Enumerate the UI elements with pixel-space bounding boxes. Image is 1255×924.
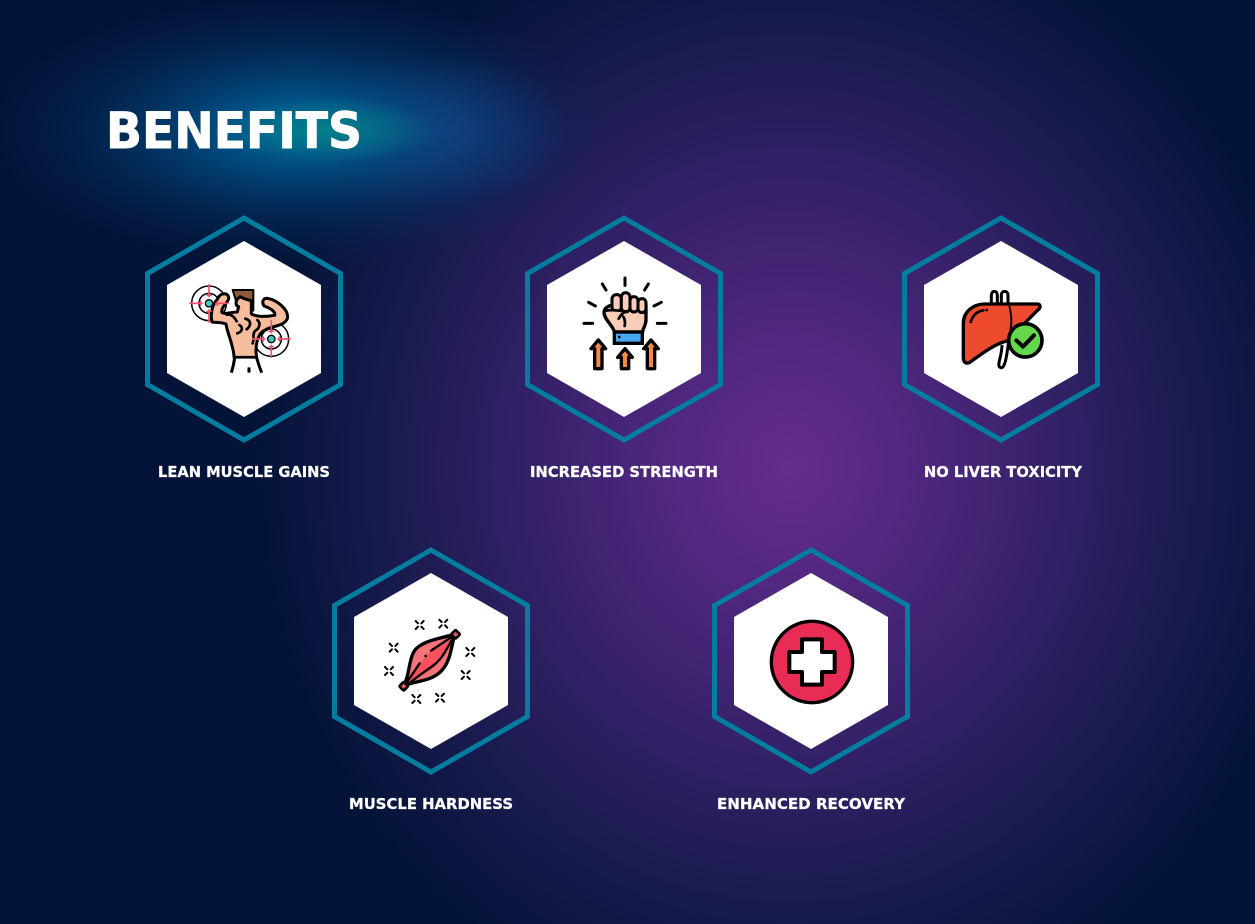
label: MUSCLE HARDNESS: [349, 795, 513, 813]
panel: muscle hardness: [334, 550, 528, 813]
label: LEAN MUSCLE GAINS: [158, 463, 330, 481]
icon: liver with check mark: [963, 291, 1042, 368]
hexagon badge: [714, 550, 908, 772]
hexagon badge: [334, 550, 528, 772]
hexagon badge: [904, 218, 1098, 440]
panel: lean muscle gains: [148, 218, 340, 481]
panel: enhanced recovery: [714, 550, 908, 813]
icon: raised fist with arrows: [584, 278, 666, 369]
icon: bodybuilder with targets: [190, 285, 290, 373]
panel: no liver toxicity: [904, 218, 1098, 481]
hexagon badge: [528, 218, 720, 440]
panel: increased strength: [528, 218, 720, 481]
title: BENEFITS: [106, 102, 362, 160]
label: NO LIVER TOXICITY: [924, 463, 1083, 481]
icon: muscle spindle with sparkles: [385, 620, 474, 703]
label: ENHANCED RECOVERY: [717, 795, 906, 813]
hexagon badge: [148, 218, 340, 440]
label: INCREASED STRENGTH: [530, 463, 718, 481]
icon: medical cross: [771, 621, 853, 703]
